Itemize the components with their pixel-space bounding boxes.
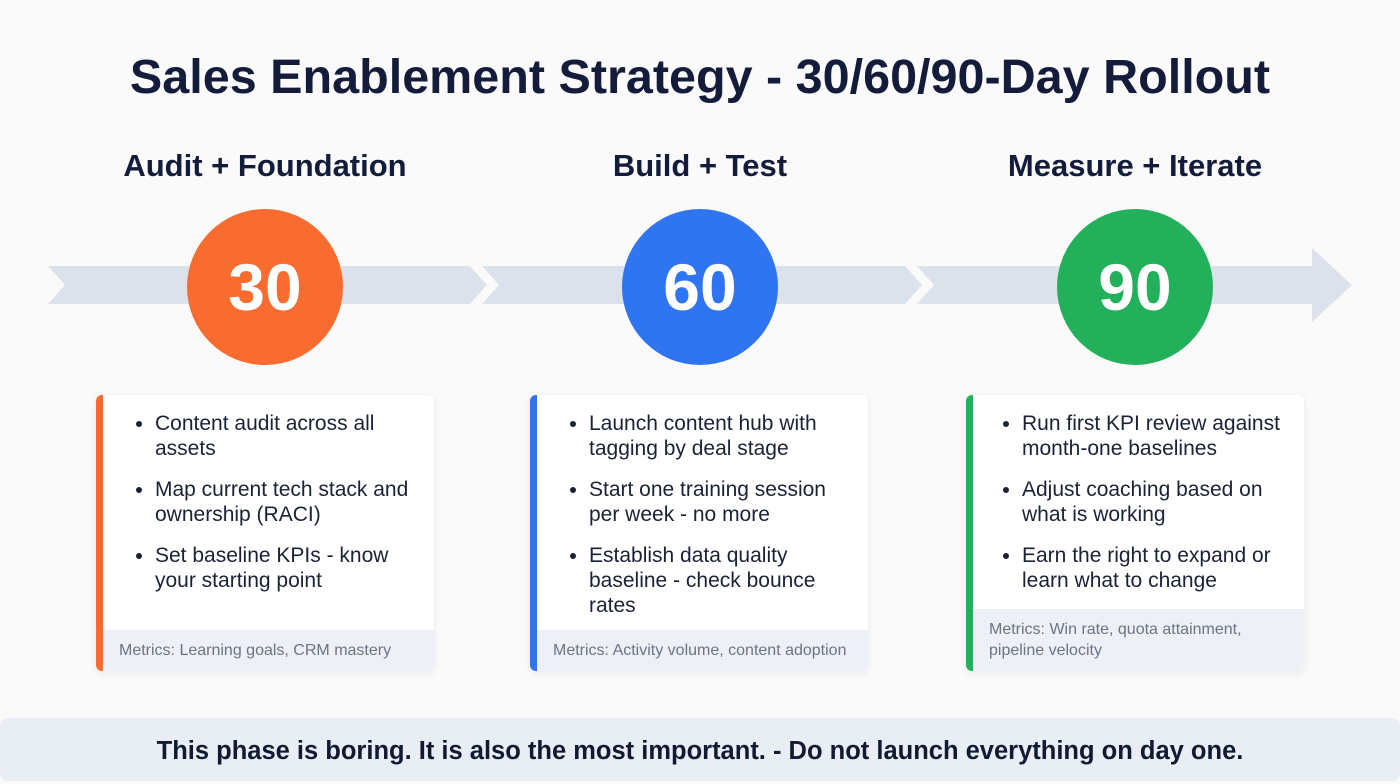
- metrics 1: Metrics: Learning goals, CRM mastery: [119, 642, 391, 659]
- bottom banner: [0, 718, 1400, 781]
- card: phase 1: [96, 395, 434, 671]
- card: phase 3: Adjust coaching based on what is working: [1022, 478, 1263, 526]
- card: phase 2: [530, 395, 868, 671]
- heading: phase 2: Build + Test: [613, 148, 787, 183]
- circle 30: [187, 209, 343, 365]
- title: Sales Enablement Strategy - 30/60/90-Day Rollout: [130, 50, 1270, 104]
- card: phase 2: Establish data quality baseline - check bounce rates: [589, 544, 815, 617]
- heading: phase 3: Measure + Iterate: [1008, 148, 1262, 183]
- circle 60: [622, 209, 778, 365]
- circle 90: 90: [1098, 250, 1172, 324]
- card: phase 3: Run first KPI review against month-one baselines: [1022, 412, 1280, 460]
- metrics 1: [103, 630, 434, 671]
- card: phase 1: Set baseline KPIs - know your starting point: [155, 544, 388, 592]
- metrics 2: Metrics: Activity volume, content adoption: [553, 642, 846, 659]
- card: phase 2: Start one training session per week - no more: [589, 478, 826, 526]
- metrics 3: [973, 609, 1304, 671]
- bottom banner: This phase is boring. It is also the most important. - Do not launch everything on day one.: [157, 737, 1243, 765]
- card: phase 1: Map current tech stack and ownership (RACI): [155, 478, 408, 526]
- circle 30: 30: [228, 250, 302, 324]
- heading: phase 1: Audit + Foundation: [123, 148, 407, 183]
- card: phase 3: Earn the right to expand or learn what to change: [1022, 544, 1271, 592]
- circle 90: [1057, 209, 1213, 365]
- card: phase 3: [966, 395, 1304, 671]
- metrics 2: [537, 630, 868, 671]
- timeline arrow: [48, 248, 1352, 322]
- circle 60: 60: [663, 250, 737, 324]
- card: phase 1: Content audit across all assets: [155, 412, 374, 460]
- metrics 3: Metrics: Win rate, quota attainment, pipeline velocity: [989, 621, 1242, 659]
- card: phase 2: Launch content hub with tagging by deal stage: [589, 412, 817, 460]
